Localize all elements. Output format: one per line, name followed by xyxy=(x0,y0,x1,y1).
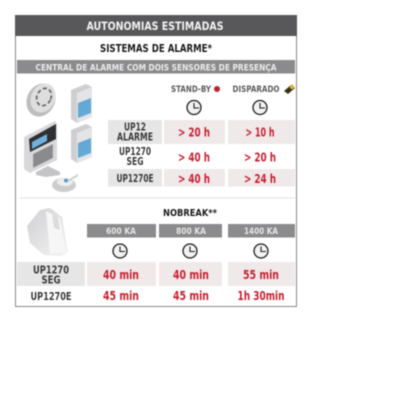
column heading: disparado: DISPARADO xyxy=(232,85,280,95)
nobreak row: UP1270E: UP1270E xyxy=(30,291,72,303)
nobreak row: UP1270E: 1h 30min xyxy=(238,288,284,303)
column heading: stand-by: STAND-BY xyxy=(171,85,211,95)
alarm equipment illustration xyxy=(21,79,92,192)
icon: clock 600 KA xyxy=(113,244,127,258)
column heading: 800 KA: 800 KA xyxy=(176,227,206,237)
nobreak row: UP1270 SEG: SEG xyxy=(42,274,60,286)
outer frame xyxy=(16,16,296,306)
nobreak row: UP1270E: 45 min xyxy=(173,288,209,303)
row: UP1270E: > 24 h xyxy=(244,171,276,186)
column heading: 600 KA: 600 KA xyxy=(106,227,136,237)
column heading: 600 KA xyxy=(87,224,156,238)
nobreak row: UP1270 SEG xyxy=(17,262,295,286)
icon: presence sensor bottom xyxy=(71,124,92,163)
icon: clock 1400 KA xyxy=(254,244,268,258)
nobreak row: UP1270E xyxy=(30,288,284,303)
icon: clock disparado xyxy=(253,100,267,114)
header band: autonomias estimadas xyxy=(15,15,297,36)
icon: clock stand-by xyxy=(187,100,201,114)
row: UP12 ALARME: UP12 xyxy=(124,122,146,134)
row: UP12 ALARME: > 20 h xyxy=(178,124,210,140)
header band: autonomias estimadas: AUTONOMIAS ESTIMADAS xyxy=(86,19,224,33)
nobreak row: UP1270 SEG: UP1270 xyxy=(33,264,69,276)
row: UP1270 SEG xyxy=(119,146,276,168)
column heading: 1400 KA: 1400 KA xyxy=(244,227,278,237)
icon: siren puck xyxy=(52,175,78,192)
icon: presence sensor top xyxy=(71,84,92,123)
row: UP1270E xyxy=(108,169,295,186)
nobreak row: UP1270 SEG: 40 min xyxy=(173,267,209,282)
row: UP12 ALARME: ALARME xyxy=(117,132,153,144)
nobreak row: UP1270 SEG: 40 min xyxy=(103,267,139,282)
column heading: 800 KA xyxy=(159,224,222,238)
icon: siren xyxy=(284,85,295,94)
row: UP12 ALARME: > 10 h xyxy=(246,124,274,140)
icon: nobreak unit xyxy=(27,208,68,256)
icon: smoke detector xyxy=(21,79,61,121)
nobreak row: UP1270E: 45 min xyxy=(103,288,139,303)
nobreak row: UP1270 SEG: 55 min xyxy=(243,267,279,282)
row: UP12 ALARME xyxy=(108,120,295,144)
icon: clock 800 KA xyxy=(183,244,197,258)
row: UP1270E: UP1270E xyxy=(116,173,154,185)
row: UP1270 SEG: SEG xyxy=(126,156,144,168)
heading: nobreak: NOBREAK** xyxy=(163,208,217,219)
row: UP1270 SEG: > 20 h xyxy=(244,150,276,164)
row: UP1270 SEG: UP1270 xyxy=(119,146,151,158)
column heading: 1400 KA xyxy=(228,224,295,238)
row: UP1270 SEG: > 40 h xyxy=(178,150,210,164)
heading: sistemas de alarme: SISTEMAS DE ALARME* xyxy=(100,43,212,55)
icon: alarm keypad xyxy=(24,121,60,177)
subheading band: central de alarme xyxy=(17,60,295,74)
subheading band: central de alarme: CENTRAL DE ALARME COM DOIS SENSORES DE PRESENÇA xyxy=(36,64,277,74)
row: UP1270E: > 40 h xyxy=(178,171,210,186)
